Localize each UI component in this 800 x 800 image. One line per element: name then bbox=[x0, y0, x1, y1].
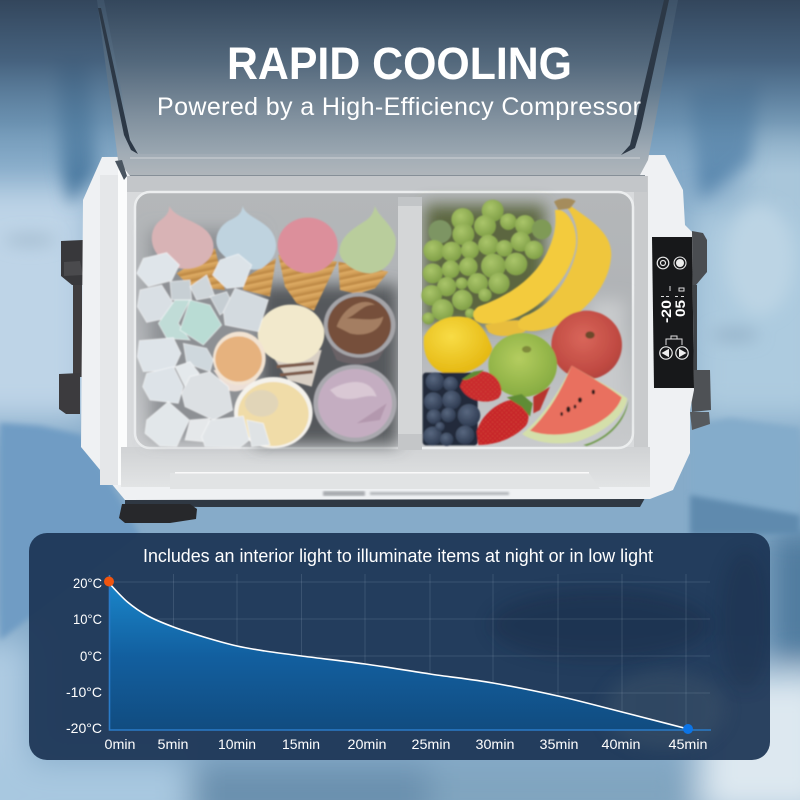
x-axis labels: 45min bbox=[668, 736, 708, 752]
y-axis labels: 10°C bbox=[73, 611, 102, 627]
cooler right handle bbox=[690, 231, 711, 430]
x-axis labels: 30min bbox=[476, 736, 514, 752]
x-axis labels: 25min bbox=[412, 736, 450, 752]
axes bbox=[110, 575, 711, 730]
cooling curve area bbox=[109, 583, 688, 730]
left arrow button bbox=[660, 347, 672, 359]
subtitle: Powered by a High-Efficiency Compressor bbox=[157, 93, 641, 121]
cooling curve line bbox=[109, 583, 688, 729]
x-axis labels: 5min bbox=[158, 736, 188, 752]
temperature display bbox=[658, 300, 688, 323]
mode connector bbox=[666, 336, 682, 345]
red apple bbox=[551, 311, 622, 379]
x-axis labels bbox=[104, 736, 708, 752]
strawberry scoop bbox=[278, 218, 338, 273]
grid lines bbox=[109, 574, 710, 730]
power icon bbox=[657, 257, 669, 269]
front banana bbox=[473, 210, 576, 324]
ice cubes bbox=[137, 253, 270, 447]
x-axis labels: 0min bbox=[104, 736, 136, 752]
x-axis labels: 20min bbox=[348, 736, 386, 752]
brand logo on front bbox=[323, 491, 509, 496]
pink soft-serve bbox=[152, 206, 214, 269]
right arrow button bbox=[676, 347, 688, 359]
strawberry upper bbox=[460, 370, 501, 402]
cooler base and wheel bbox=[119, 498, 645, 523]
y-axis labels: 20°C bbox=[73, 575, 102, 591]
watermelon slice bbox=[522, 366, 628, 446]
fan icon bbox=[674, 257, 686, 269]
temperature display: 05 bbox=[672, 300, 688, 317]
chart heading: Includes an interior light to illuminate items at night or in low light bbox=[143, 546, 653, 566]
panel shading bbox=[498, 594, 715, 747]
taro cup bbox=[313, 365, 397, 442]
x-axis labels: 15min bbox=[282, 736, 320, 752]
rear banana bbox=[518, 205, 611, 331]
cooler body bbox=[81, 155, 694, 500]
cones: wafer bodies bbox=[177, 248, 388, 311]
cooler interior rim bbox=[127, 176, 647, 192]
chocolate cup bbox=[324, 292, 396, 364]
control panel bbox=[652, 237, 694, 388]
start point bbox=[104, 576, 114, 586]
panel: cooling chart bbox=[29, 533, 770, 760]
blueberries bbox=[423, 372, 480, 446]
y-axis labels: -20°C bbox=[66, 720, 102, 736]
temperature display: -20 bbox=[658, 300, 674, 323]
end point bbox=[683, 724, 693, 734]
peach cup bbox=[213, 332, 266, 391]
cooler left handle bbox=[59, 240, 83, 414]
matcha soft-serve bbox=[339, 206, 396, 273]
status ticks bbox=[661, 286, 684, 296]
vanilla cup with scoop bbox=[258, 305, 324, 387]
vanilla bean cup bbox=[234, 377, 313, 448]
third banana tip bbox=[485, 320, 527, 336]
centre divider bbox=[398, 197, 422, 450]
lemon bbox=[424, 317, 492, 374]
y-axis labels bbox=[66, 575, 102, 736]
y-axis labels: 0°C bbox=[80, 648, 102, 664]
lid interior bbox=[97, 0, 678, 180]
grapes bbox=[421, 200, 552, 324]
x-axis labels: 10min bbox=[218, 736, 256, 752]
interior liner bbox=[135, 192, 633, 448]
strawberry lower bbox=[477, 394, 533, 445]
blue soft-serve bbox=[216, 206, 276, 270]
x-axis labels: 35min bbox=[540, 736, 578, 752]
x-axis labels: 40min bbox=[602, 736, 640, 752]
green apple bbox=[488, 333, 557, 397]
left compartment: ice cream and ice bbox=[137, 206, 397, 448]
banana crown bbox=[554, 198, 576, 210]
right compartment: fruit bbox=[421, 198, 628, 446]
title: RAPID COOLING bbox=[227, 38, 572, 89]
y-axis labels: -10°C bbox=[66, 684, 102, 700]
